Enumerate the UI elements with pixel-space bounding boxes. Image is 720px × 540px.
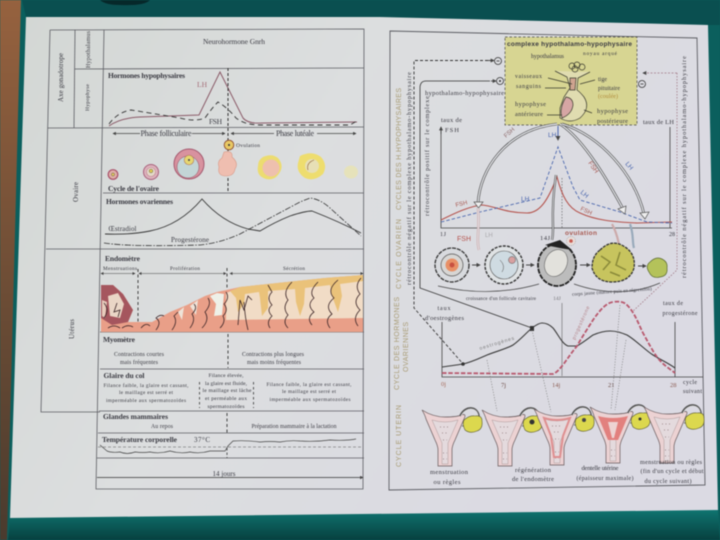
chart: ovarian hormones: 28: [670, 382, 676, 389]
myometre section: Contractions courtes: [114, 352, 165, 358]
side labels: CYCLE UTERIN: [396, 405, 403, 467]
positive feedback left: solid: rétrocontrôle positif sur le complexe: [424, 96, 431, 216]
temperature curve: 37°C: [194, 436, 210, 444]
glaire du col section: le maillage est lâche: [202, 388, 252, 394]
chart: FSH and LH: 14J: [540, 235, 550, 242]
yellow box: hypothalamo-pituitary complex: hypophyse: [597, 108, 628, 115]
yellow box: hypothalamo-pituitary complex: sanguins: [516, 84, 542, 90]
yellow box: hypothalamo-pituitary complex: antérieure: [515, 111, 543, 118]
phase labels: [113, 129, 356, 138]
glaire du col section: Filance élevée,: [208, 373, 244, 379]
dark top shadow: [22, 0, 720, 25]
negative feedback left: dashed: rétrocontrôle négatif sur le complexe hypothalamo-hypophysaire: [406, 72, 413, 285]
glaire du col section: le maillage est serré et: [282, 389, 337, 395]
yellow box: hypothalamo-pituitary complex: hypophyse: [515, 101, 546, 108]
temperature curve: Température corporelle: [102, 435, 178, 444]
uterus captions: [430, 459, 704, 486]
row labels: Ovaire: [72, 182, 80, 202]
heading: Neurohormone GnRH: Neurohormone Gnrh: [203, 37, 265, 46]
growth and corpus luteum captions: croissance d'un follicule cavitaire: [466, 297, 536, 302]
hormone arrows: FSH: [503, 127, 516, 139]
chart: hormones ovariennes: [104, 197, 361, 246]
chart: hormones hypophysaires: LH: [197, 80, 208, 89]
ovary cycle follicles: [108, 140, 358, 193]
chart: ovarian hormones: cycle: [683, 380, 697, 386]
uterus: maximum thickness: [590, 405, 650, 463]
phase labels: Phase folliculaire: [140, 129, 192, 138]
right panel: cycle diagram: [389, 31, 705, 490]
growth and corpus luteum captions: [438, 283, 660, 376]
chart: ovarian hormones: 21: [608, 382, 614, 389]
side labels: CYCLES DES H.HYPOPHYSAIRES: [396, 88, 403, 210]
yellow box: hypothalamo-pituitary complex: tige: [598, 77, 607, 83]
chart: hormones ovariennes: Œstradiol: [108, 225, 137, 233]
hormone arrows: LH: [623, 161, 634, 172]
regressing corpus luteum: [647, 258, 667, 277]
endometre section: Menstruations: [103, 266, 137, 272]
uterine glands: [104, 278, 361, 330]
chart: ovarian hormones: 7j: [501, 382, 506, 389]
follicle stages: [435, 236, 667, 286]
dark top blob: [100, 0, 150, 5]
mature follicle: [538, 240, 576, 286]
yellow box: hypothalamo-pituitary complex: complexe hypothalamo-hypophysaire: [507, 41, 632, 48]
chart: ovarian hormones: oestrogènes: [479, 336, 515, 352]
glaire du col section: [104, 371, 352, 410]
side labels: CYCLE DES HORMONES: [394, 297, 401, 390]
glaire du col section: et perméable aux: [205, 396, 247, 402]
phase labels: Phase lutéale: [276, 129, 314, 138]
yellow box: hypothalamo-pituitary complex: noyau arqué: [583, 51, 618, 57]
released oocyte: [566, 236, 576, 246]
chart: ovarian hormones: [425, 301, 703, 412]
growth and corpus luteum captions: 14J: [553, 296, 562, 302]
chart: ovarian hormones: 14j: [552, 382, 560, 389]
chart: FSH and LH: FSH: [455, 200, 468, 209]
uterus captions: ou règles: [434, 479, 461, 486]
growing follicle: [485, 246, 523, 284]
chart: FSH and LH: taux de: [441, 117, 462, 124]
glandes mammaires section: [103, 412, 337, 433]
uterus captions: régénération: [515, 467, 552, 474]
negative feedback right: rétrocontrôle négatif sur le complexe hypothalamo-hypophysaire: [681, 56, 688, 278]
uterus captions: menstruation ou règles: [640, 459, 703, 466]
glaire du col section: imperméable aux spermatozoïdes: [270, 397, 350, 403]
chart: FSH and LH: [440, 117, 675, 242]
hormone arrows: LH: [485, 233, 493, 239]
myometre section: mais moins fréquentes: [247, 359, 302, 366]
brown table edge: [0, 0, 21, 540]
endometre section: Endomètre: [105, 254, 141, 263]
chart: FSH and LH: ovulation: [565, 230, 597, 237]
row labels: Axe gonadotrope: [57, 53, 65, 102]
side labels: [394, 88, 410, 467]
uterus captions: dentelle utérine: [582, 465, 619, 472]
positive feedback left: solid: [420, 78, 532, 328]
duration arrow: 14 jours: 14 jours: [212, 470, 236, 478]
chart: FSH and LH: 28: [669, 232, 675, 238]
side labels: CYCLE OVARIEN: [396, 219, 403, 289]
table grid: [41, 29, 364, 489]
chart: ovarian hormones: progestérone: [662, 311, 698, 317]
frame: [389, 31, 705, 490]
chart: FSH and LH: LH: [521, 196, 530, 203]
side labels: OVARIENNES: [403, 322, 410, 372]
yellow box: hypothalamo-pituitary complex: (coulée): [598, 93, 618, 100]
chart: FSH and LH: taux de LH: [643, 119, 674, 126]
chart: hormones ovariennes: Hormones ovariennes: [106, 197, 173, 206]
ovary cycle follicles: Cycle de l'ovaire: [108, 184, 160, 193]
temperature curve: [98, 435, 363, 458]
myometre section: [103, 334, 305, 368]
chart: FSH and LH: FSH: [445, 127, 459, 134]
myometre section: Myomètre: [103, 335, 136, 344]
endometre section: Sécrétion: [283, 266, 305, 272]
teal bottom edge: [8, 510, 720, 540]
row labels: [57, 30, 92, 339]
chart: hormones hypophysaires: Hormones hypophysaires: [108, 71, 185, 80]
uterus stages: [422, 405, 704, 466]
chart: ovarian hormones: suivant: [683, 389, 702, 395]
yellow box: hypothalamo-pituitary complex: vaisseaux: [515, 74, 542, 80]
chart: ovarian hormones: 0j: [441, 381, 446, 388]
myometre section: mais fréquentes: [120, 359, 159, 366]
uterus: next menstruation: [644, 405, 704, 463]
chart: ovarian hormones: progestérone: [571, 305, 592, 341]
endometrium tissue: [101, 275, 363, 332]
stage arrows: [472, 265, 646, 266]
chart: FSH and LH: LH: [579, 189, 590, 200]
chart: ovarian hormones: taux de: [663, 301, 683, 307]
glaire du col section: le maillage est serré et: [119, 390, 174, 396]
primary follicle: [435, 248, 469, 282]
uterus captions: (épaisseur maximale): [576, 475, 634, 482]
uterus captions: du cycle suivant): [644, 478, 692, 485]
yellow box: hypothalamo-pituitary complex: pituitaire: [598, 86, 620, 92]
negative feedback left: dashed: [406, 58, 502, 365]
hormone arrows: FSH: [586, 160, 600, 175]
glaire du col section: Filance faible, la glaire est cassant,: [104, 382, 188, 389]
negative feedback right: [632, 56, 688, 312]
pituitary gland drawing: [545, 62, 595, 121]
row labels: Hypothalamus: [86, 30, 92, 68]
uterus captions: de l'endomètre: [512, 476, 554, 483]
ovary cycle follicles: Ovulation: [236, 143, 260, 149]
glandes mammaires section: Préparation mammaire à la lactation: [252, 424, 337, 430]
chart: FSH and LH: 1J: [440, 232, 447, 238]
corpus luteum: [592, 243, 634, 282]
hormone arrows: [457, 124, 649, 250]
glandes mammaires section: Au repos: [151, 424, 174, 430]
chart: hormones hypophysaires: [108, 68, 357, 193]
endometre section: Prolifération: [170, 265, 200, 272]
positive feedback left: solid: hypothalamo-hypophysaire: [425, 90, 504, 97]
row labels: Utérus: [68, 319, 76, 339]
chart: hormones hypophysaires: FSH: [209, 117, 223, 126]
yellow box: hypothalamo-pituitary complex: hypothalamus: [531, 54, 565, 60]
glaire du col section: imperméable aux spermatozoïdes: [106, 398, 186, 404]
uterus captions: menstruation: [430, 469, 469, 476]
hormone arrows: FSH: [457, 236, 471, 243]
endometre section: [101, 254, 363, 332]
chart: FSH and LH: FSH: [579, 206, 593, 217]
uterus: lace stage: [534, 407, 594, 465]
growth and corpus luteum captions: corps jaune (mature puis en régression): [572, 287, 652, 298]
glaire du col section: la glaire est fluide,: [205, 380, 248, 387]
yellow box: hypothalamo-pituitary complex: [505, 37, 637, 125]
glandes mammaires section: Glandes mammaires: [103, 412, 168, 421]
glaire du col section: Glaire du col: [104, 371, 144, 380]
chart: hormones ovariennes: Progestérone: [171, 236, 209, 244]
glaire du col section: spermatozoïdes: [208, 404, 244, 410]
uterus: menstruation: [422, 408, 482, 466]
yellow box: hypothalamo-pituitary complex: postérieure: [597, 118, 628, 125]
glaire du col section: Filance faible, la glaire est cassant,: [266, 381, 352, 388]
hormone arrows: LH: [548, 132, 557, 139]
chart: ovarian hormones: taux: [438, 306, 450, 312]
myometre section: Contractions plus longues: [242, 352, 305, 358]
chart: ovarian hormones: d'oestrogènes: [425, 315, 464, 322]
row labels: Hypophyse: [85, 83, 91, 111]
uterus: regeneration: [482, 408, 542, 466]
left panel: hormonal chart table: [41, 29, 364, 489]
uterus captions: (fin d'un cycle et début: [640, 468, 704, 475]
